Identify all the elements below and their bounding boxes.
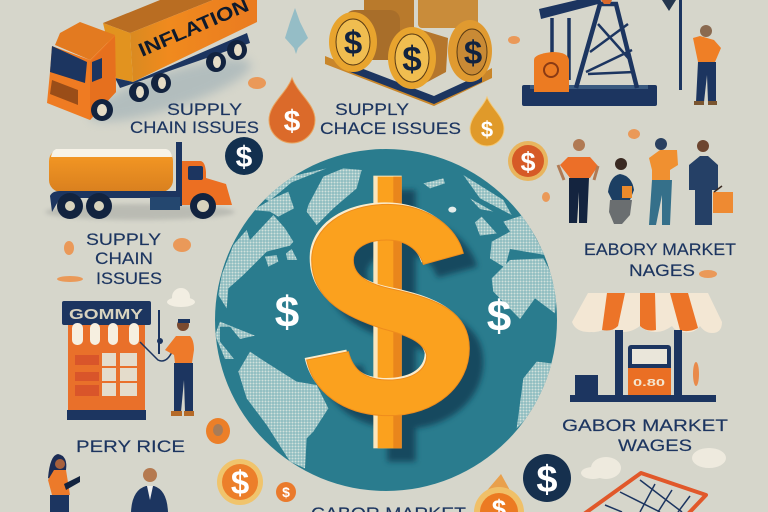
label: supply chain issues 1 [130,100,259,137]
coin centre [388,27,448,89]
coin right: $ [464,34,482,71]
label: supply chain issues 2: ISSUES [96,269,162,288]
drop icon: gold [470,97,504,146]
left storefront: GOMMY [69,306,143,323]
label: supply chace issues: CHACE ISSUES [320,119,461,138]
coin: small: $ [282,484,290,500]
label: gabor market wages: GABOR MARKET [562,416,728,435]
worker 4 [689,140,733,225]
oil pump [522,0,657,106]
worker 1 [558,139,598,223]
shopping cart [584,473,706,512]
map continents [215,168,557,468]
label: gabor market wages: WAGES [618,436,692,455]
truck: inflation [47,0,257,133]
blue water mark [285,8,308,54]
small dollar left: $ [275,288,299,337]
worker 3 [649,138,678,225]
clouds right [581,448,726,479]
label: eabory market wages: EABORY MARKET [584,240,736,259]
label: supply chain issues 2 [86,230,162,288]
worker by pole [693,25,721,105]
label: gabor market wages [562,416,728,455]
coin centre: $ [402,40,422,79]
cab [55,22,115,60]
drop icon: bottom [474,474,524,512]
coin right [448,20,492,82]
pole and flag [662,0,682,90]
tanker truck [45,142,235,220]
label: eabory market wages [584,240,736,280]
dollar shadow [321,190,483,462]
small dollar right: $ [487,292,511,341]
left storefront [62,301,151,420]
truck: inflation: INFLATION [136,0,252,62]
right shop with fuel pump: 0.80 [633,378,666,389]
coin: bottom gold: $ [231,464,249,501]
big dollar sign [305,176,469,448]
coin: orange-red: $ [520,147,536,177]
coin left [329,12,377,72]
label: eabory market wages: NAGES [629,261,695,280]
coin: bottom gold [217,459,263,505]
label: supply chain issues 1: CHAIN ISSUES [130,118,259,137]
woman with tablet [48,454,80,512]
trailer [103,0,213,33]
coin: navy bottom [523,454,571,502]
wheels [91,40,247,121]
label: supply chace issues: SUPPLY [335,100,409,119]
coin: small [276,482,296,502]
coin: navy bottom: $ [536,459,558,501]
coin: navy top: $ [236,141,253,174]
coin: orange-red [508,141,548,181]
awning stripes [72,323,139,345]
coin: navy top [225,137,263,175]
drop icon: large: $ [284,105,301,138]
label: pery rice: PERY RICE [76,437,185,456]
label: supply chace issues [320,100,461,138]
drop icon: large [269,78,315,143]
decorative orange marks [57,36,717,282]
product shelves [102,353,137,396]
cloud left [167,288,195,307]
drop icon: gold: $ [481,117,493,142]
label: supply chain issues 2: SUPPLY [86,230,161,249]
coin left: $ [344,24,362,61]
label: supply chain issues 1: SUPPLY [167,100,242,119]
person at fuel hose [140,310,194,416]
man in suit [131,468,168,512]
label: supply chain issues 2: CHAIN [95,249,153,268]
pallet of coin barrels [325,0,492,106]
globe [215,149,557,491]
orange pin [206,418,230,444]
right shop with fuel pump [570,293,722,402]
worker 2 [608,158,634,224]
group of workers [558,138,733,225]
